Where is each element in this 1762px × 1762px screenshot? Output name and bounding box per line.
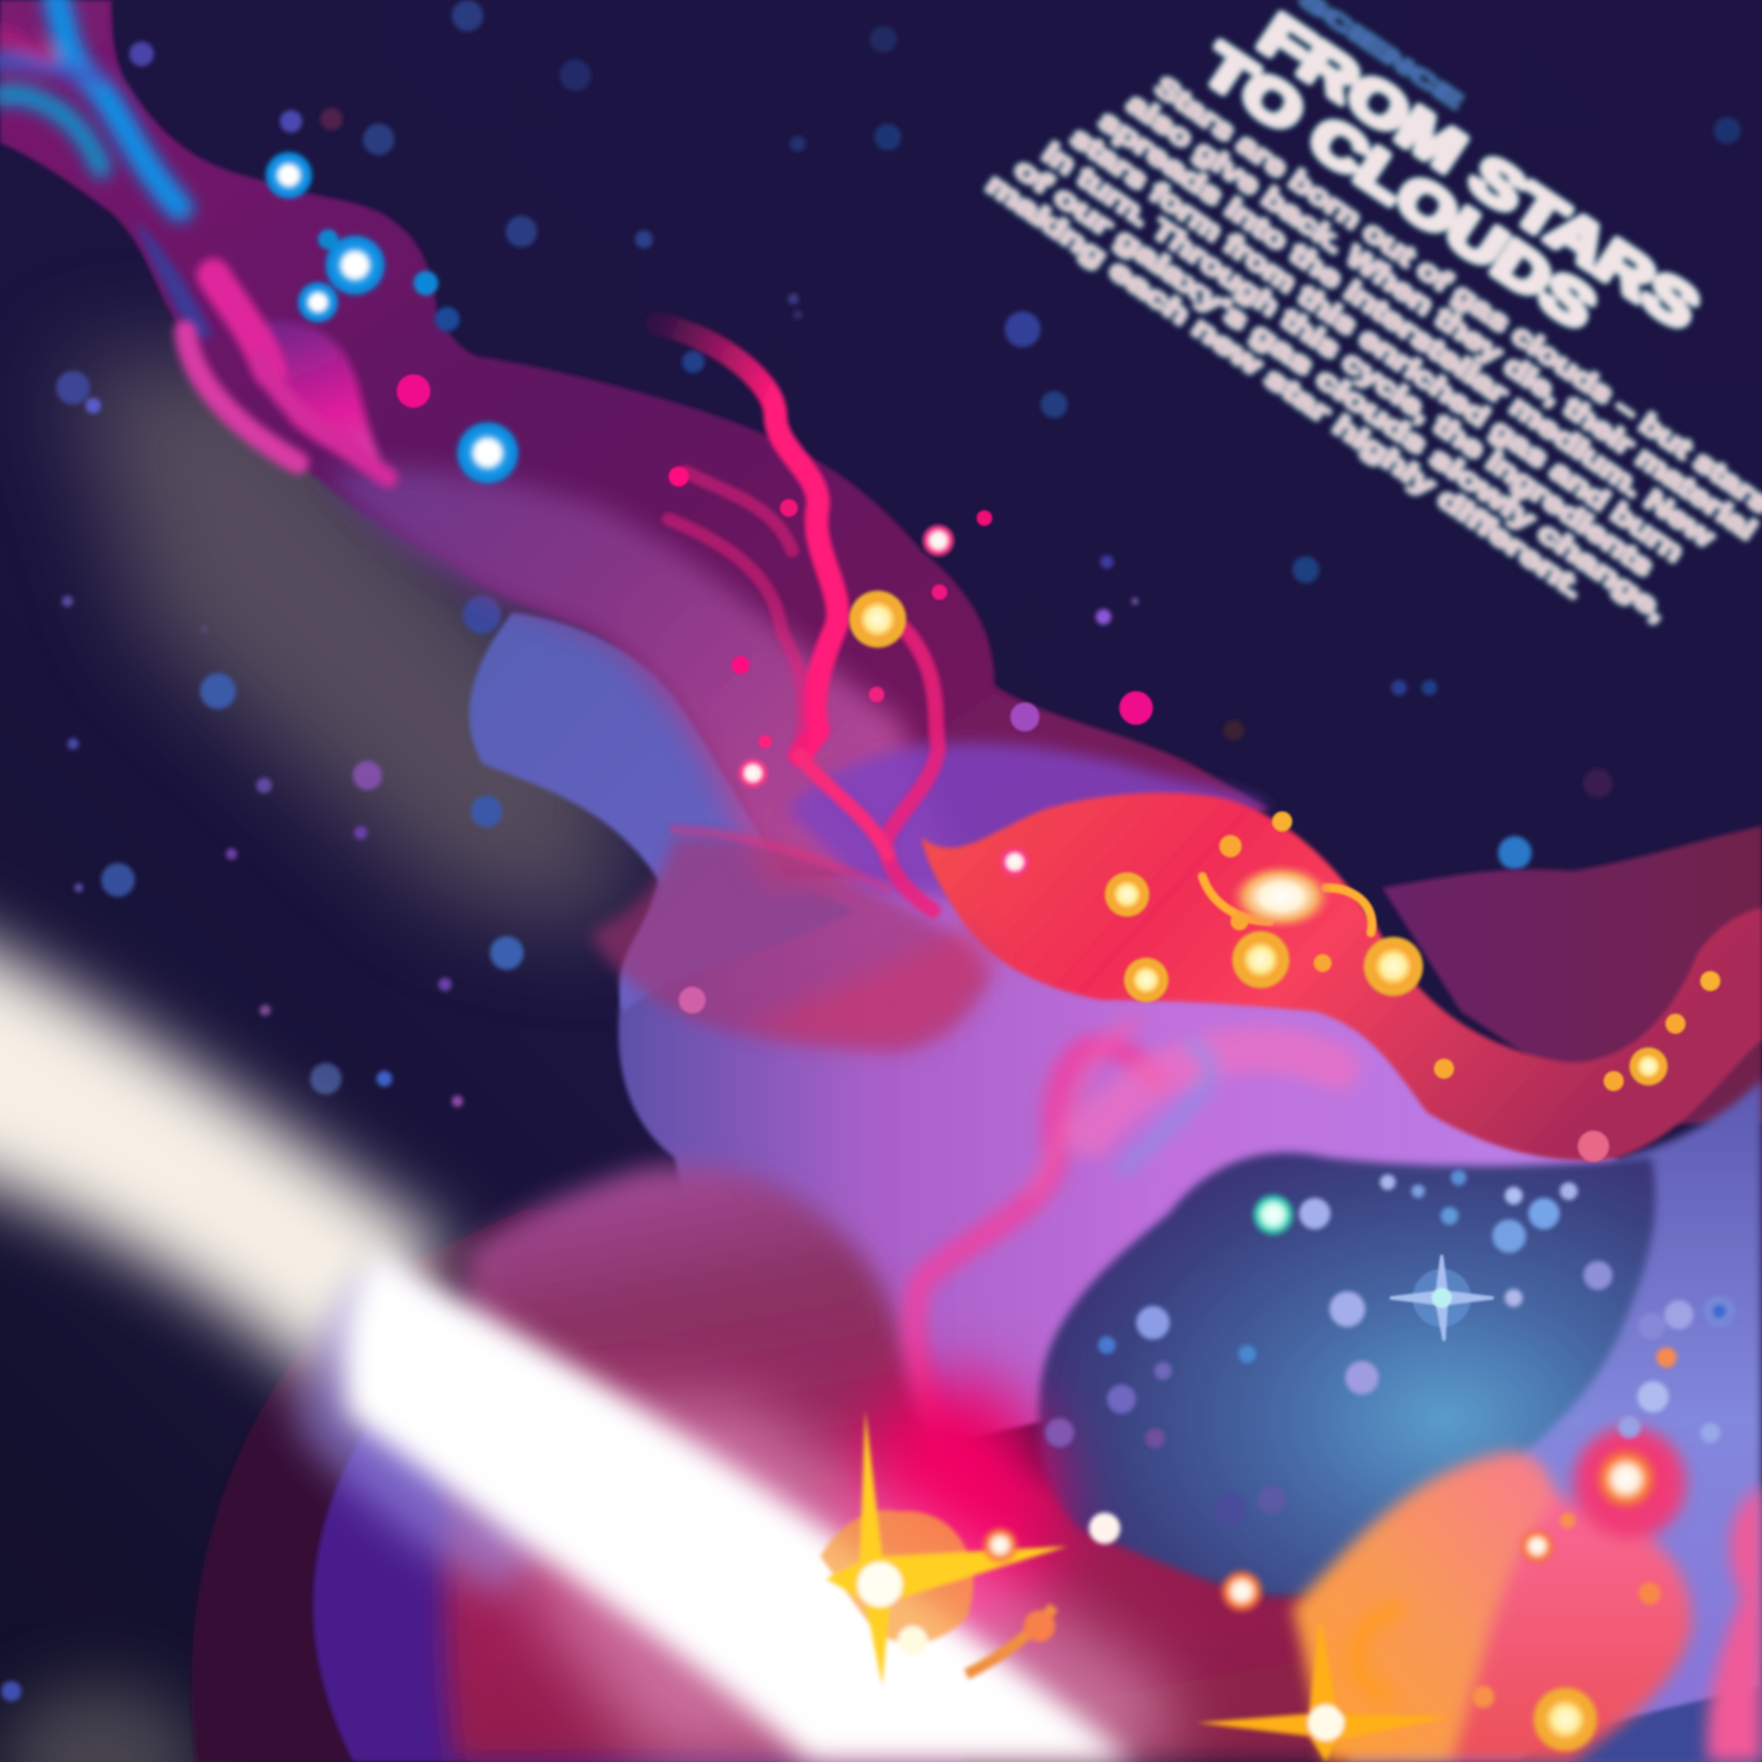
body paragraph: Stars are born out of gas clouds – but stars [1150, 70, 1762, 519]
nebula: red-pink mid lobe [590, 836, 989, 1051]
glare: left cream band [0, 910, 449, 1393]
icon: gold starburst [820, 1410, 1068, 1686]
main filament [657, 324, 838, 755]
glare: white hot band across nebula [344, 1253, 1135, 1762]
glare: lavender edge on disc [298, 1275, 629, 1596]
glowing stars lower right [1218, 1445, 1661, 1753]
hot-pink squiggle filaments [657, 324, 938, 910]
nebula: periwinkle haze right [1348, 1079, 1762, 1762]
body paragraph: spreads into the interstellar medium. New [1093, 104, 1720, 553]
body paragraph: in turn. Through this cycle, the ingredients [1037, 137, 1659, 582]
body paragraph: stars form from this enriched gas and burn [1065, 121, 1689, 568]
orange ring arc [1356, 1607, 1405, 1697]
nebula: right maroon band [1382, 826, 1762, 1124]
nebula: coral-red lobe with stars [921, 793, 1762, 1160]
glare: faint sheen bottom-left corner [0, 1683, 202, 1762]
orange flame [1292, 1452, 1554, 1762]
nebula: deep lower-left disc [192, 1208, 966, 1762]
top-left cyan and magenta streams [0, 0, 180, 208]
pink halo star [1573, 1427, 1686, 1540]
lower branch [800, 755, 888, 854]
nebula: lilac central body [618, 832, 1629, 1438]
article heading block [1191, 0, 1710, 342]
soft magenta body [267, 320, 388, 478]
magenta and pink stars along filaments [397, 374, 1153, 1014]
blue under-edge of ribbon [135, 219, 214, 337]
nebula: deep red lower body [444, 1166, 1461, 1762]
crimson centre of gold starburst [854, 1377, 1056, 1646]
golden stars on coral lobe [998, 811, 1720, 1162]
body paragraph: making each new star highly different. [981, 168, 1589, 604]
right filament [884, 629, 938, 910]
glare: diffuse grey sheen on the print [67, 360, 629, 933]
title: from stars to clouds: FROM STARS [1248, 2, 1710, 342]
magenta ribbons upper-left [185, 275, 388, 478]
faint branch [674, 829, 888, 888]
pink heart lobe [1434, 1473, 1692, 1762]
icon: four-point pale star [1391, 1256, 1492, 1339]
body paragraph: also give back. When they die, their material [1121, 87, 1762, 546]
nebula: periwinkle cloud [469, 612, 854, 1011]
purple arc [314, 1270, 966, 1762]
body paragraph [981, 70, 1762, 627]
icon: gold sparkle lower right [1197, 1618, 1450, 1762]
nebula: violet glow under red lobe [787, 743, 1270, 899]
second filament [669, 472, 803, 747]
glare: pink halo around band [494, 1405, 1169, 1762]
nebula: pink wisps in lilac [914, 1023, 1337, 1472]
nebula: dark patch lower right [1517, 1686, 1762, 1762]
nebula: blue cloud with stars [1038, 1152, 1655, 1596]
nebula: coral tail into lilac [742, 921, 1000, 1046]
body paragraph: of our galaxy's gas clouds slowly change, [1009, 153, 1673, 627]
title: from stars to clouds [1191, 2, 1710, 342]
outer dark maroon arc [192, 1208, 899, 1762]
pale stars in blue cloud [1045, 1170, 1735, 1544]
blue giant stars upper left [264, 151, 520, 485]
nebula: orange and pink flame lobes lower right [1292, 1427, 1762, 1762]
nebula: mauve veil between ribbon and cloud [326, 468, 966, 888]
title: from stars to clouds: TO CLOUDS [1191, 32, 1607, 342]
nebula: upper magenta ribbon [0, 0, 1270, 877]
far right pink lobe [1707, 1483, 1762, 1762]
